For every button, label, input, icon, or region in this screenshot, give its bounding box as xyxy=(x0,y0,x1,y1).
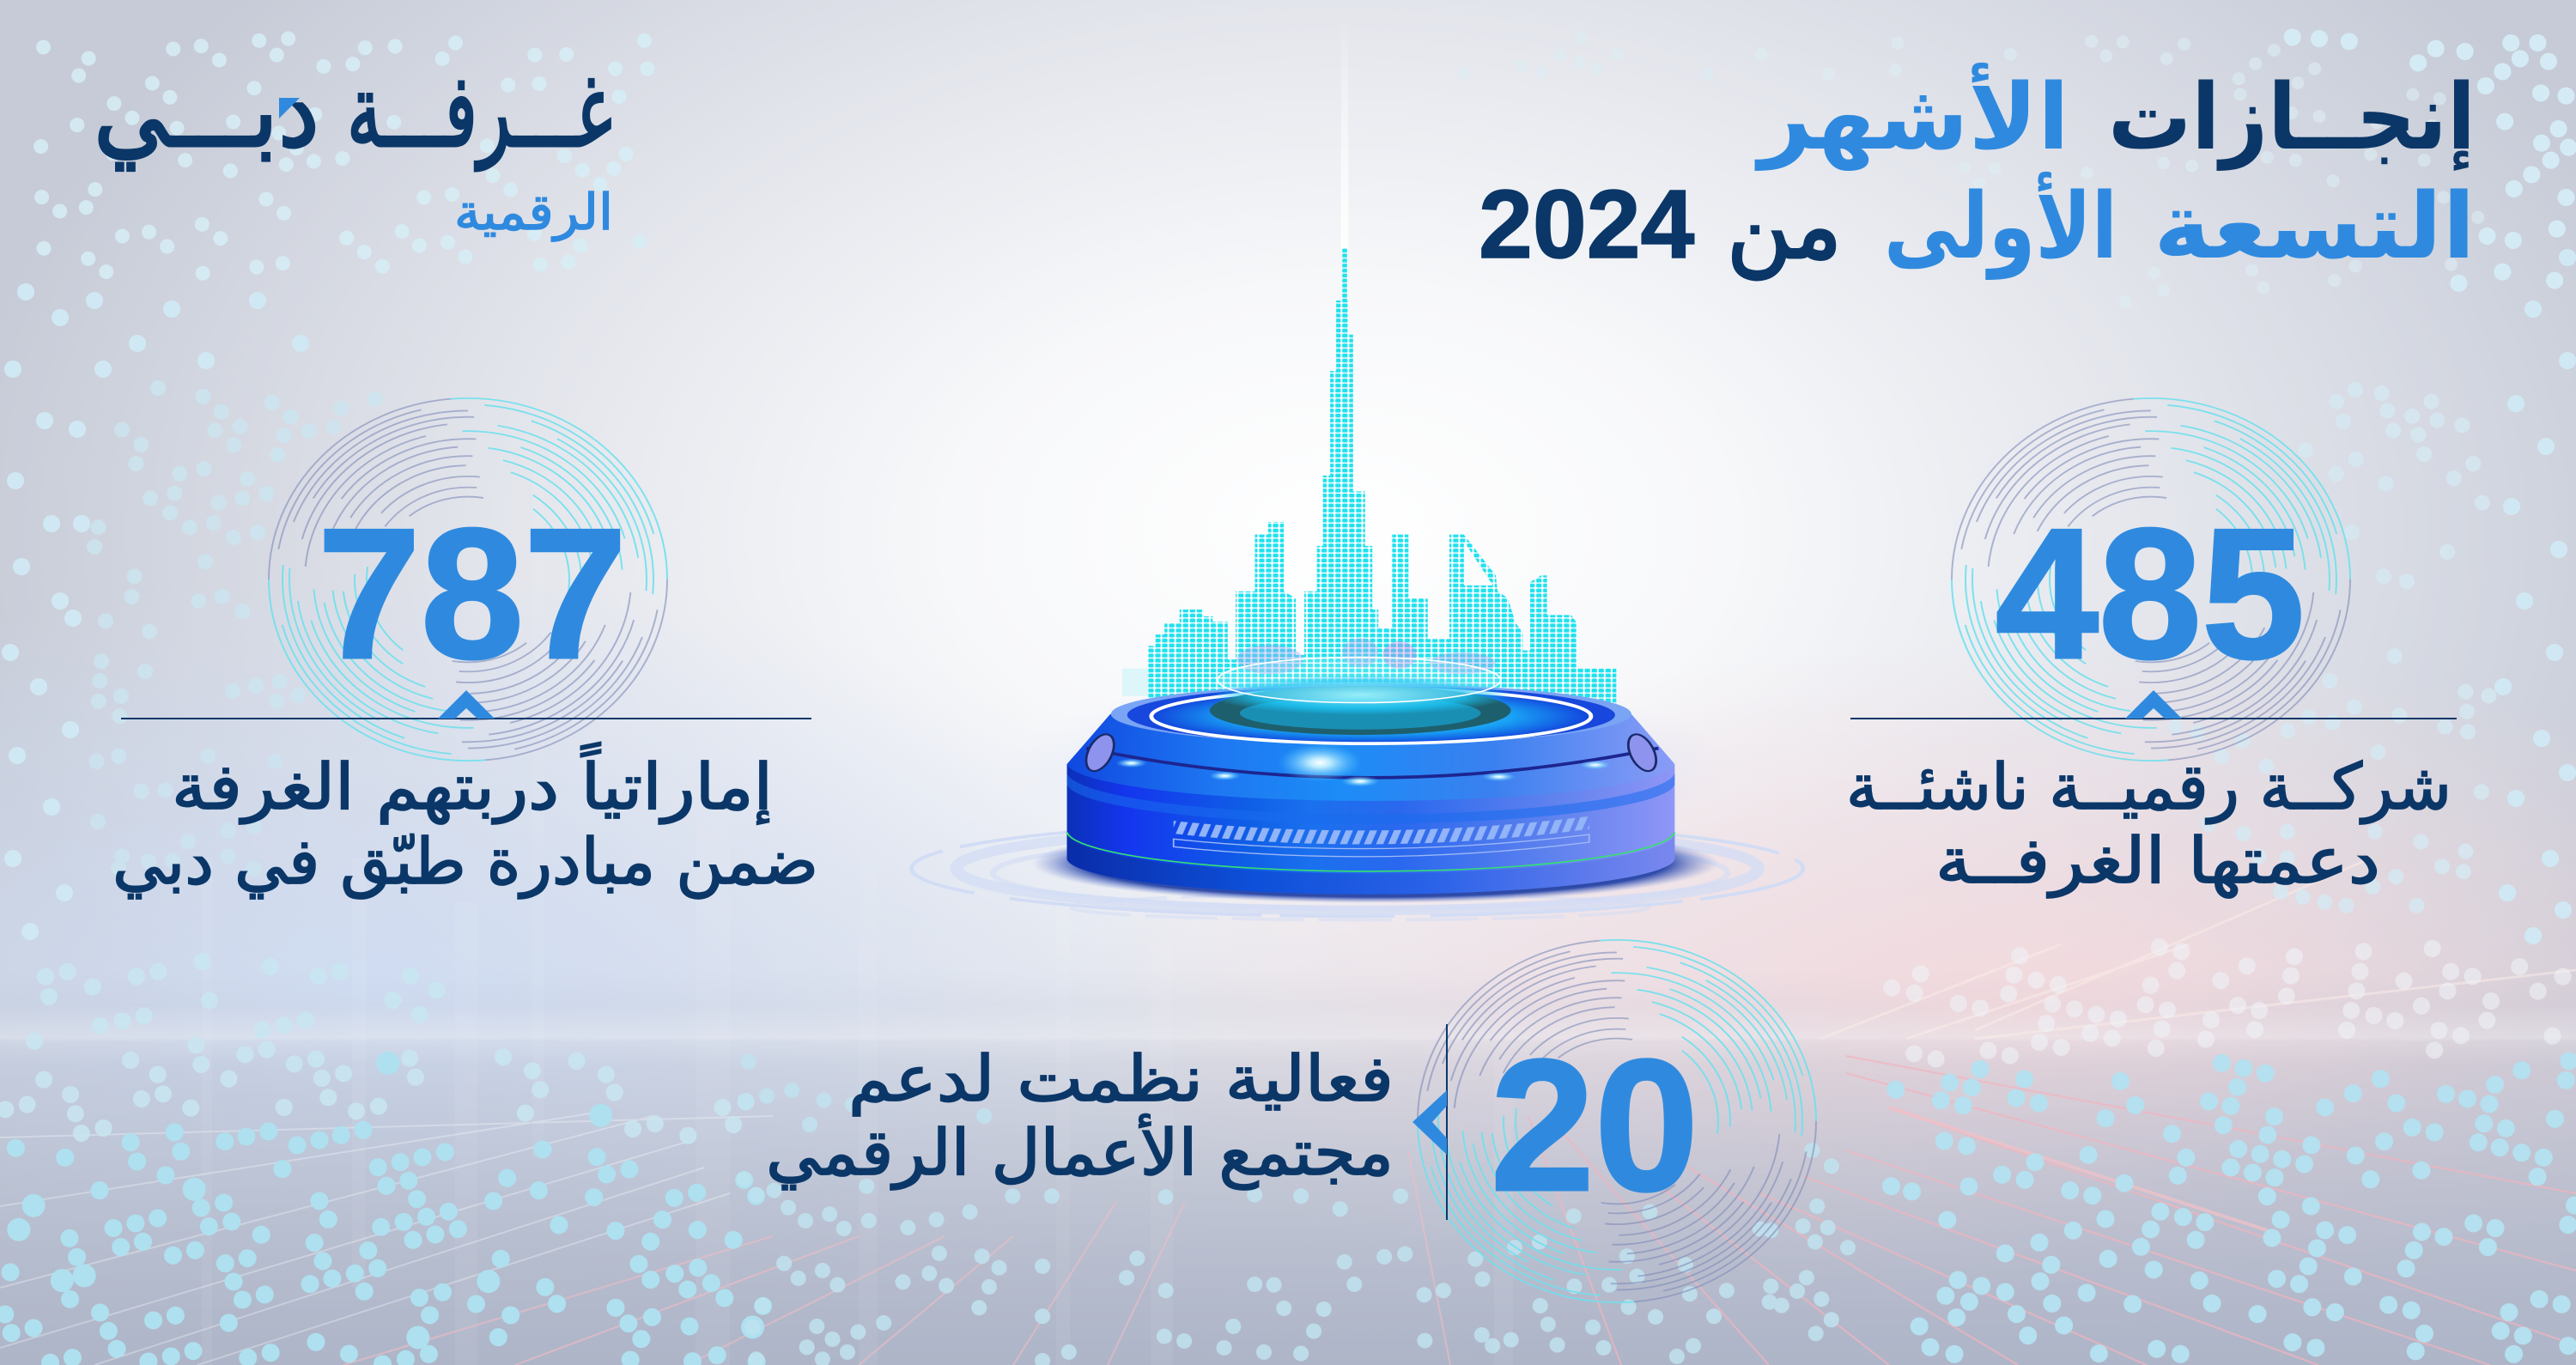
title year: 2024 xyxy=(1479,170,1695,278)
label line 2: دعمتها الغرفــة xyxy=(1935,824,2380,898)
logo word dubai: دبـــي xyxy=(94,52,319,171)
divider xyxy=(1850,718,2457,719)
halo and shadow xyxy=(1002,673,1737,864)
number: 787 xyxy=(318,489,627,697)
rings xyxy=(1418,940,1816,1302)
logo blue accent xyxy=(279,98,300,118)
rings xyxy=(1952,398,2350,761)
divider xyxy=(1446,1024,1448,1220)
divider xyxy=(121,718,811,719)
label line 1: شركــة رقميــة ناشئــة xyxy=(1846,750,2451,824)
number: 20 xyxy=(1491,1022,1698,1230)
pedestal lower band xyxy=(1067,834,1674,895)
side knob right xyxy=(1623,731,1662,774)
central platform with Dubai skyline xyxy=(912,14,1803,920)
title line 2 navy word: من xyxy=(1727,173,1842,280)
chevron xyxy=(438,690,495,719)
glowing star xyxy=(1278,743,1362,782)
label line 2: مجتمع الأعمال الرقمي xyxy=(766,1113,1394,1190)
center disc xyxy=(1210,686,1511,735)
title line 2 blue word: التسعة xyxy=(2154,173,2476,279)
stat 485 xyxy=(1846,398,2457,898)
pedestal shoulder xyxy=(1067,714,1674,801)
title line 2 blue word 2: الأولى xyxy=(1884,171,2117,281)
hologram ring xyxy=(1218,658,1501,703)
pedestal body xyxy=(1067,764,1674,895)
chevron xyxy=(1413,1090,1447,1155)
title line 1 blue: الأشهر xyxy=(1754,62,2069,171)
skyline xyxy=(1148,248,1616,705)
outline band xyxy=(1174,834,1589,857)
top surface xyxy=(1111,684,1631,744)
light beam above spire xyxy=(1341,14,1348,251)
label line 1: فعالية نظمت لدعم xyxy=(848,1042,1394,1116)
rings xyxy=(269,398,667,761)
stat 20 xyxy=(766,940,1816,1302)
hatch band xyxy=(1174,816,1589,845)
label line 1: إماراتياً دربتهم الغرفة xyxy=(172,742,773,824)
stat 787 xyxy=(112,398,818,899)
side knob left xyxy=(1081,731,1120,774)
green trim xyxy=(1067,832,1674,871)
chevron xyxy=(2125,690,2182,719)
groove xyxy=(1086,748,1658,778)
logo word ghurfa: غـــرفـــة xyxy=(347,52,612,171)
title xyxy=(1479,62,2476,281)
groove lights xyxy=(1115,759,1611,786)
light band xyxy=(1067,774,1674,823)
title line 1 navy: إنجــازات xyxy=(2108,64,2476,171)
logo subtitle: الرقمية xyxy=(454,183,613,242)
number: 485 xyxy=(1996,489,2305,697)
floor hud rings xyxy=(912,821,1803,920)
label line 2: ضمن مبادرة طبّق في دبي xyxy=(112,825,818,899)
logo xyxy=(94,52,613,242)
hologram blobs xyxy=(1236,638,1496,674)
